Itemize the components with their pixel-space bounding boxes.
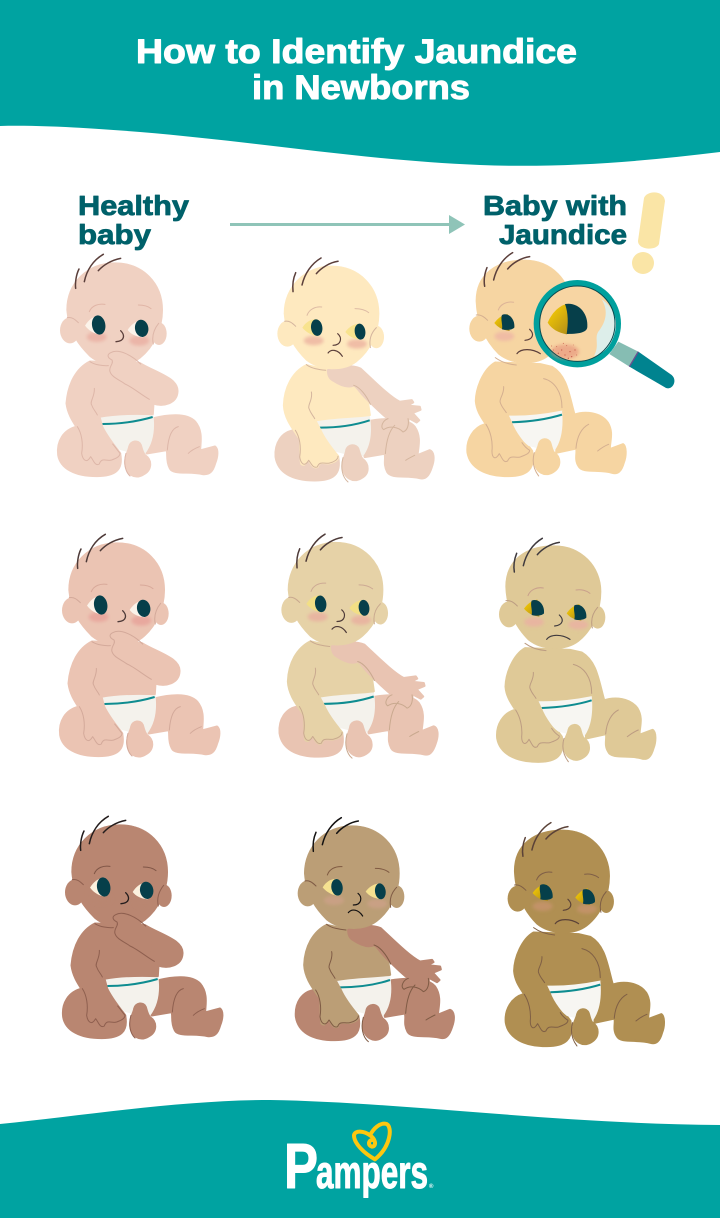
magnifying glass (537, 283, 674, 388)
baby: early jaundice, medium skin (280, 534, 437, 758)
baby: healthy, dark skin (63, 816, 222, 1038)
label: healthy baby: Healthy (78, 190, 189, 221)
magnifier handle (609, 342, 674, 388)
label: baby with jaundice: Baby with (483, 190, 627, 221)
title: How to Identify Jaundice (136, 33, 577, 71)
label: healthy baby (78, 190, 189, 250)
label: baby with jaundice (483, 190, 627, 250)
baby: early jaundice, dark skin (296, 818, 454, 1042)
registered mark: ® (429, 1183, 434, 1190)
title (136, 33, 577, 107)
baby: jaundice, medium skin (497, 538, 655, 762)
logo: Pampers (284, 1124, 434, 1202)
title: in Newborns (252, 69, 470, 107)
baby: early jaundice, light skin (276, 258, 433, 482)
footer band (0, 1100, 720, 1218)
arrow (230, 215, 465, 234)
magnifier lens (537, 283, 618, 364)
label: baby with jaundice: Jaundice (499, 219, 627, 250)
icon: exclamation mark (632, 192, 665, 274)
baby: healthy, medium skin (60, 534, 219, 756)
baby: healthy, light skin (58, 254, 217, 476)
logo wordmark: ampers (316, 1146, 428, 1198)
logo heart (354, 1124, 390, 1159)
label: healthy baby: baby (78, 219, 151, 250)
baby: jaundice, dark skin (506, 823, 664, 1046)
header band (0, 0, 720, 166)
baby: jaundice, light skin (467, 253, 626, 476)
logo wordmark: P (284, 1130, 318, 1202)
